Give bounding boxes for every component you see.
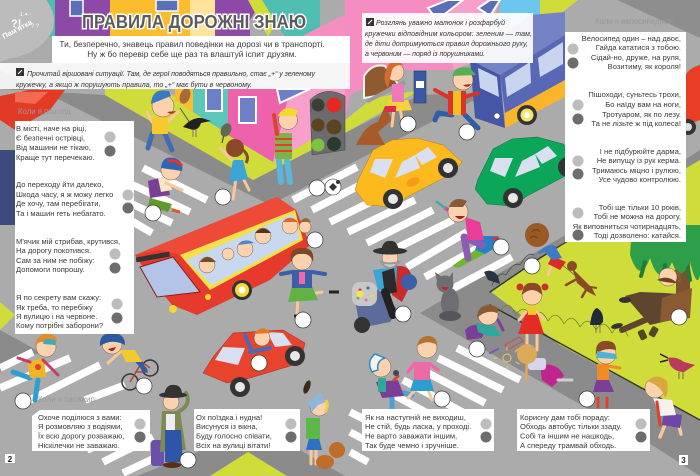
panel: cyclist poems: Велосипед один – над двоє, xyxy=(582,34,681,43)
crosswalk stripes xyxy=(0,167,520,473)
chalk drawing xyxy=(490,337,523,369)
spotted cat xyxy=(316,442,345,469)
page number 3: 3 xyxy=(681,456,686,465)
boy in striped jumper xyxy=(274,108,298,182)
panel: cyclist poems: Не випущу із рук керма. xyxy=(597,156,681,165)
girl with hands on hips xyxy=(516,283,548,350)
panel: cyclist poems xyxy=(565,32,686,242)
yellow car xyxy=(355,138,462,209)
panel: pedestrian poems: М'ячик мій стрибав, крутився, xyxy=(16,237,120,246)
task two panel: Розглянь уважно малюнок і розфарбуй xyxy=(376,19,505,27)
park lawn xyxy=(490,160,700,420)
tree xyxy=(630,225,700,298)
panel: cyclist poems: Та не лізьте ж під колеса! xyxy=(591,119,681,128)
panel: pedestrian poems: Допомоги попрошу. xyxy=(16,265,84,274)
fence xyxy=(490,215,700,420)
panel: passenger poem four: Обходь автобус тільки ззаду. xyxy=(520,422,622,431)
panel: pedestrian poems: Шкода часу, я ж можу легко xyxy=(16,190,113,199)
motorcyclist xyxy=(352,241,417,333)
task two panel xyxy=(362,13,533,63)
panel: cyclist poems: Тобі ще тільки 10 років, xyxy=(599,203,681,212)
boy with racket xyxy=(147,87,192,150)
panel: pedestrian poems: В місті, наче на ріці, xyxy=(16,124,86,133)
lime accents xyxy=(0,302,287,476)
memo badge: 1 ✦ · xyxy=(20,12,32,18)
boy with blue cap and binoculars xyxy=(370,354,412,415)
dark bird on fence xyxy=(484,271,500,284)
intro band: Ну ж бо перевір себе ще раз та влаштуй іспит друзям. xyxy=(87,49,297,59)
panel: cyclist poems: Тоді дозволено: катайся. xyxy=(594,231,681,240)
panel: pedestrian poems: До переходу йти далеко, xyxy=(16,180,103,189)
girl with net xyxy=(219,122,249,199)
grey cat xyxy=(435,272,461,321)
panel: passenger poem one: Їх всю дорогу розважаю, xyxy=(38,432,124,440)
skateboarding boy xyxy=(148,157,182,212)
panel: passenger poem four: А спереду трамвай обходь. xyxy=(520,441,616,450)
pink bird xyxy=(660,354,695,379)
blindfolded girl xyxy=(593,341,620,407)
curly boy with blue backpack xyxy=(525,223,576,276)
task one xyxy=(16,68,316,89)
page number 3 xyxy=(679,455,688,465)
boy on bicycle xyxy=(100,333,158,390)
dog sitting xyxy=(356,106,392,145)
panel: passenger poem one xyxy=(32,410,150,451)
black crow on lawn xyxy=(590,308,603,333)
red car at right edge xyxy=(680,65,700,135)
intro band xyxy=(0,36,350,89)
panel: pedestrian poems: Як треба, то перебіжу xyxy=(16,303,93,312)
panel: cyclist poems: Тротуаром, як по лезу. xyxy=(602,110,681,119)
task one: кружечку, а якщо ж порушують правила, то „+“ має бути в червоному. xyxy=(16,81,252,89)
running boy in cap xyxy=(13,334,58,400)
panel: cyclist poems: І не підбурюйте дарма, xyxy=(600,147,681,156)
page number 2 xyxy=(5,454,15,464)
bus stop sign xyxy=(414,71,426,103)
panel: passenger poem three: Не варто заважати іншим, xyxy=(365,432,457,440)
buildings and pavements, left block xyxy=(47,0,578,180)
red car bottom with boy xyxy=(203,328,305,397)
title: ПРАВИЛА ДОРОЖНІ ЗНАЮ xyxy=(82,12,306,32)
panel: passenger poem three: Як на наступній не виходиш, xyxy=(365,413,466,422)
panel: pedestrian poems: Я вулицю і на червоне. xyxy=(16,312,97,321)
panel: passenger poem two: Висунуся із вікна, xyxy=(196,422,258,431)
panel: passenger poem one: Ніскілечки не заважаю. xyxy=(38,441,120,450)
panel: passenger poem four xyxy=(517,409,650,451)
red car top left xyxy=(0,90,65,130)
panel: pedestrian poems: Сам за ним не побіжу: xyxy=(16,256,95,265)
boots on grass xyxy=(637,326,659,341)
panel: cyclist poems: Бо наїду вам на ноги, xyxy=(605,100,681,109)
panel: pedestrian poems: Де хочу, там перебігати, xyxy=(16,199,101,208)
panel: cyclist poems: Усе чудово контролюю. xyxy=(599,175,681,184)
brown dog on lead xyxy=(566,261,597,297)
panel: passenger poem four: Корисну дам тобі пораду: xyxy=(520,413,610,422)
panel: cyclist poems: Пішоходи, суньтесь трохи, xyxy=(588,90,681,99)
man with hat and suitcase xyxy=(151,385,188,468)
running boy with green cap xyxy=(435,67,478,128)
girl in pink jacket xyxy=(408,336,438,400)
task one: Прочитай віршовані ситуації. Там, де герої поводяться правильно, стає „+“ у зеленому xyxy=(27,70,316,78)
panel: cyclist poems: Гайда кататися з тобою. xyxy=(596,43,681,52)
panel: pedestrian poems xyxy=(15,121,134,334)
panel: passenger poem four: Собі та іншим не нашкодь, xyxy=(520,432,614,440)
section heading: cyclist: Коли я велосипедист: xyxy=(595,17,673,26)
red school bus xyxy=(135,197,311,315)
traffic light xyxy=(310,91,345,155)
panel: pedestrian poems: Та і машин геть небагато. xyxy=(16,209,106,218)
task two panel: кружечки відповідним кольором: зеленим — там, xyxy=(365,30,532,38)
panel: passenger poem three xyxy=(362,409,494,451)
girl in blue jacket on roller skates xyxy=(281,248,339,316)
panel: passenger poem two xyxy=(194,409,300,451)
intro band: Ти, безперечно, знавець правил поведінки на дорозі чи в транспорті. xyxy=(59,39,325,49)
panel: cyclist poems: Возитиму, як короля! xyxy=(608,62,681,71)
panel: cyclist poems: Сідай-но, друже, на руля, xyxy=(591,53,681,62)
panel: pedestrian poems: Краще тут перечекаю. xyxy=(16,153,95,162)
panel: pedestrian poems: Кому потрібні заборони? xyxy=(16,321,103,330)
task two panel: а червоним — поряд із порушниками. xyxy=(365,50,485,58)
panel: cyclist poems: Як виповниться чотирнадцять, xyxy=(573,222,681,231)
page number 2: 2 xyxy=(8,455,13,464)
green car xyxy=(475,137,582,208)
kneeling girl xyxy=(517,344,572,387)
crow on pavement xyxy=(183,118,211,137)
memo badge: · ? ? xyxy=(27,24,40,30)
panel: passenger poem two: Ох поїздка і нудна! xyxy=(196,413,262,422)
memo badge: Пам'ятка xyxy=(1,17,34,41)
section heading: passenger: Коли я пасажир: xyxy=(38,395,97,404)
man relaxing under tree xyxy=(611,268,692,330)
task two panel: де діти дотримуються правил дорожнього руху, xyxy=(365,40,528,48)
soccer ball xyxy=(325,179,341,195)
answer circles xyxy=(15,116,687,468)
dark car at left edge xyxy=(0,150,15,225)
bending boy xyxy=(645,376,682,437)
blue bus xyxy=(470,12,565,128)
panel: passenger poem two: Буду голосно співати, xyxy=(196,432,272,440)
panel: cyclist poems: Тобі не можна на дорогу, xyxy=(594,212,681,221)
panel: passenger poem one: Охоче поділюся з вами: xyxy=(38,413,122,422)
section heading: pedestrian: Коли я пішохід: xyxy=(18,107,73,116)
memo badge xyxy=(0,0,54,62)
building windows xyxy=(70,0,500,123)
panel: pedestrian poems: Є безпечні острівці, xyxy=(16,134,85,142)
girl with hat and cat xyxy=(302,379,328,464)
memo badge: ?! xyxy=(11,18,21,30)
panel: pedestrian poems: На дорогу покотився. xyxy=(16,246,91,255)
panel: passenger poem one: Я розмовляю з водіями, xyxy=(38,422,122,431)
boy drawing on pavement xyxy=(465,305,503,340)
panel: passenger poem two: Всіх на вулиці вітати! xyxy=(196,441,270,450)
panel: passenger poem three: Не стій, будь ласка, у проході. xyxy=(365,422,471,431)
panel: passenger poem three: Так буде чемно і зручніше. xyxy=(365,441,459,450)
panel: cyclist poems: Тримаюсь міцно і рулюю, xyxy=(592,166,681,175)
boy on toy car xyxy=(437,199,503,268)
panel: pedestrian poems: Від машини не тікаю, xyxy=(16,143,91,152)
panel: pedestrian poems: Я по секрету вам скажу: xyxy=(16,293,101,302)
girl near bus stop xyxy=(384,61,412,126)
